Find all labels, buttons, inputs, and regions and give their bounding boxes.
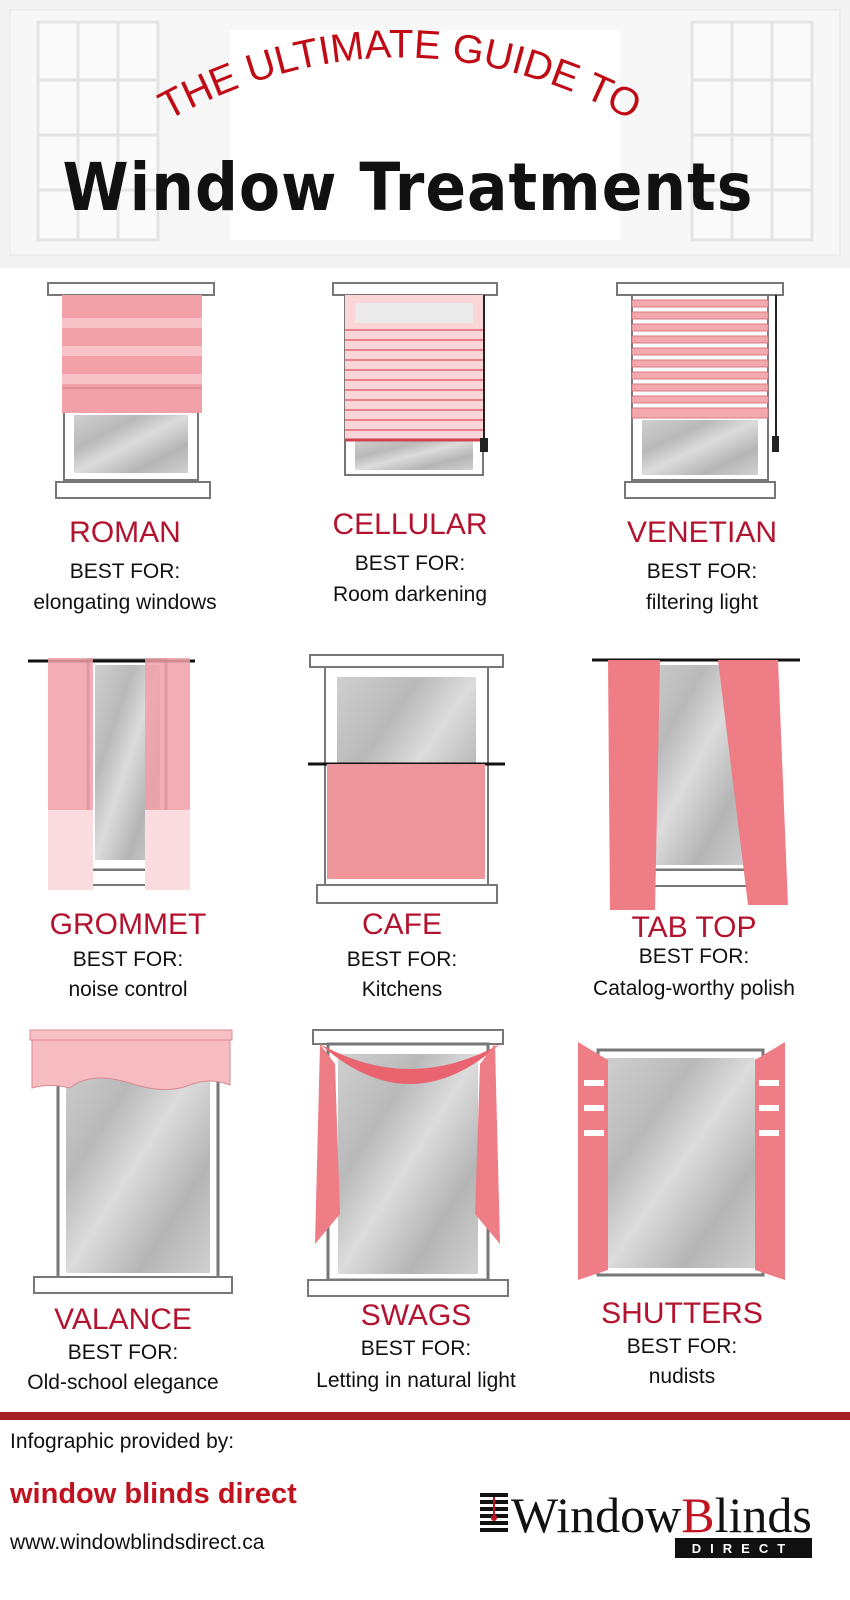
window: grommet [28,658,195,890]
label: cellular: BEST FOR: [355,552,465,575]
label: cafe [347,908,457,1001]
footer: credits: Infographic provided by: [10,1430,234,1453]
label: shutters: BEST FOR: [627,1335,737,1358]
label: roman: ROMAN [69,516,181,549]
label: valance [27,1303,219,1394]
label: swags: SWAGS [361,1299,471,1332]
title: main: Window Treatments [63,148,753,225]
label: swags: BEST FOR: [361,1337,471,1360]
label: grommet: BEST FOR: [73,948,183,971]
footer: credits [10,1430,297,1554]
window: shutters [578,1042,785,1280]
label: cellular [332,508,488,606]
label: grommet [50,908,206,1001]
window: swags [308,1030,508,1296]
label: tab top: BEST FOR: [639,945,749,968]
label: cafe: Kitchens [362,978,442,1001]
window: cafe [308,655,505,903]
label: venetian: BEST FOR: [647,560,757,583]
footer: credits: window blinds direct [10,1478,297,1510]
label: valance: Old-school elegance [27,1371,219,1394]
label: venetian: filtering light [646,591,758,614]
label: grommet: noise control [68,978,188,1001]
divider bar [0,1412,850,1420]
label: swags: Letting in natural light [316,1369,516,1392]
label: roman [33,516,217,614]
window: venetian [617,283,783,498]
label: shutters [601,1297,763,1388]
label: swags [316,1299,516,1392]
footer: credits: www.windowblindsdirect.ca [10,1531,264,1554]
label: tab top: TAB TOP [631,911,757,944]
label: valance: BEST FOR: [68,1341,178,1364]
label: shutters: SHUTTERS [601,1297,763,1330]
label: roman: elongating windows [33,591,217,614]
label: cafe: BEST FOR: [347,948,457,971]
label: shutters: nudists [649,1365,715,1388]
label: cellular: Room darkening [333,583,487,606]
label: valance: VALANCE [54,1303,192,1336]
logo: WindowBlinds Direct: DIRECT [692,1541,794,1556]
label: roman: BEST FOR: [70,560,180,583]
label: cafe: CAFE [362,908,442,941]
label: venetian: VENETIAN [627,516,777,549]
window: tab top [592,660,800,910]
label: tab top: Catalog-worthy polish [593,977,795,1000]
title: curved red line: THE ULTIMATE GUIDE TO [156,30,639,116]
label: tab top [593,911,795,1000]
logo: WindowBlinds Direct: WindowBlinds [511,1488,812,1543]
label: venetian [627,516,777,614]
window: valance [30,1030,232,1293]
header: window backdrop with title [0,0,850,268]
label: cellular: CELLULAR [332,508,488,541]
window: roman [48,283,214,498]
label: grommet: GROMMET [50,908,206,941]
illustrations [28,282,800,1297]
window: cellular [333,283,497,475]
